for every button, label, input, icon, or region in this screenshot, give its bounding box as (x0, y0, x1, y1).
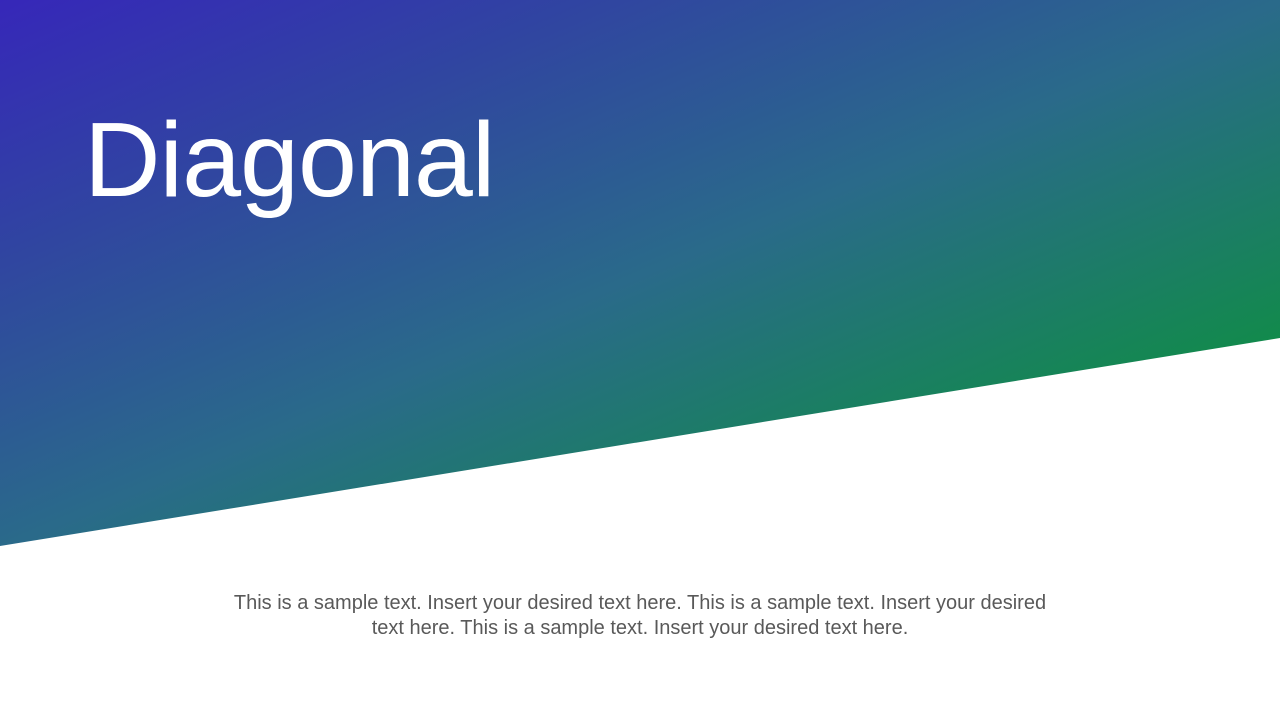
body text: This is a sample text. Insert your desired text here. This is a sample text. Insert your desired text here. This is a sample text. Insert your desired text here. (234, 592, 1046, 639)
title: Diagonal (84, 101, 494, 219)
